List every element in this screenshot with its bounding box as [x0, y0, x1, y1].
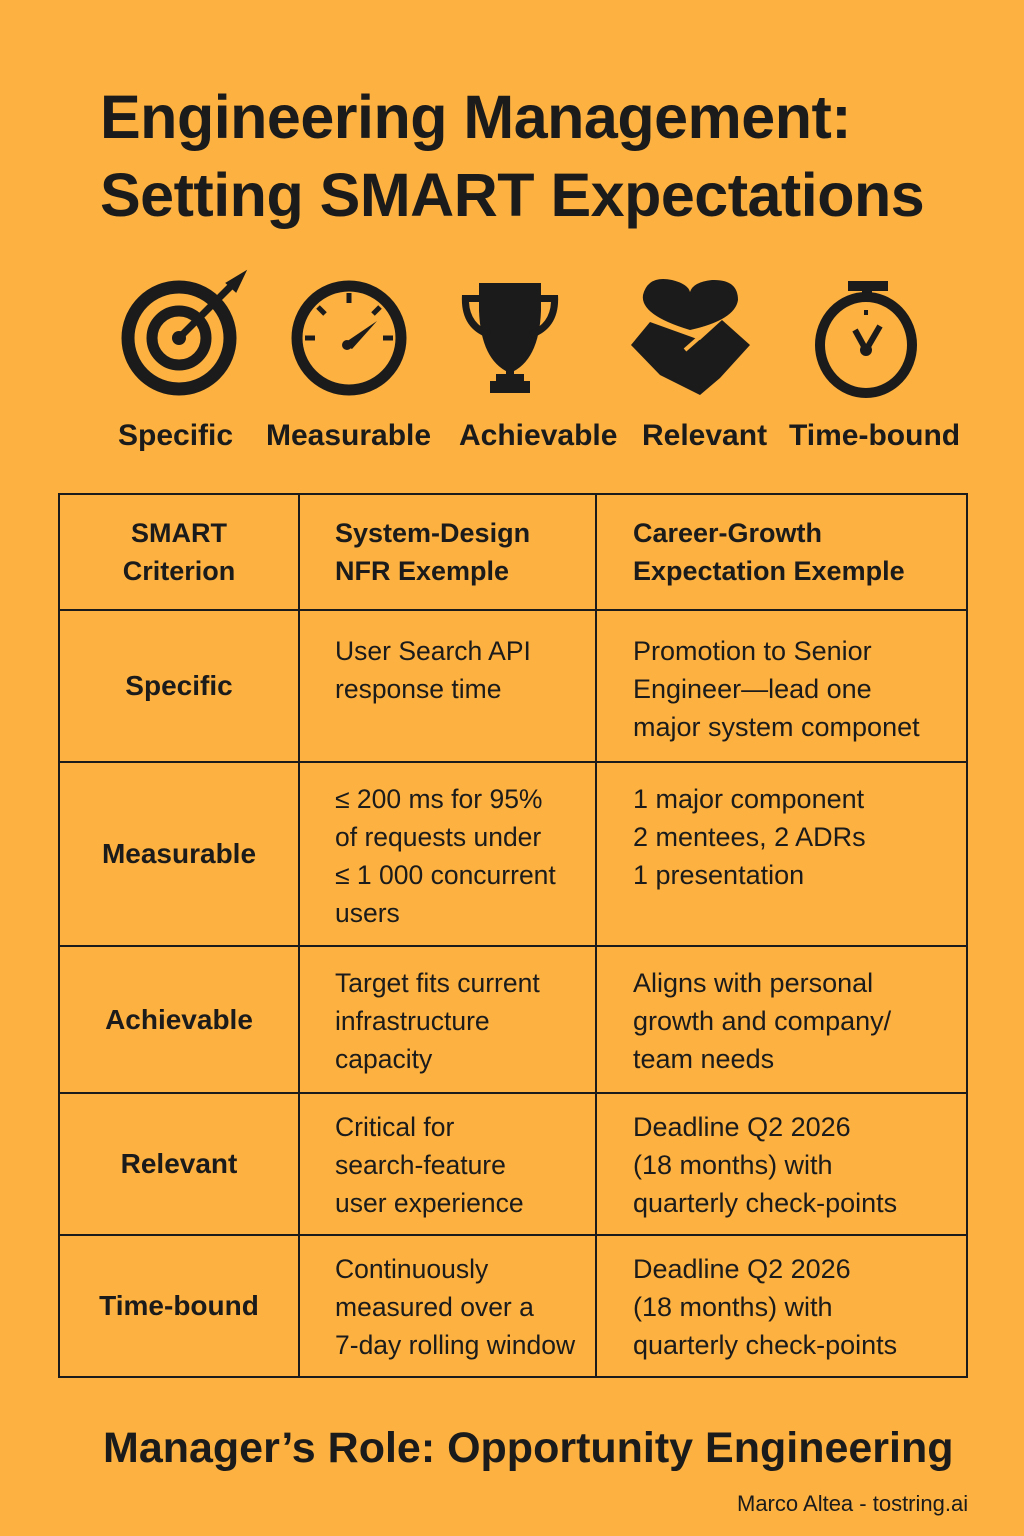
table: quarterly check-points	[633, 1188, 897, 1218]
text: Relevant	[642, 419, 767, 452]
table: response time	[335, 674, 501, 704]
table: Continuously	[335, 1254, 488, 1284]
text: Achievable	[459, 419, 617, 452]
table: Relevant	[121, 1148, 237, 1179]
table: (18 months) with	[633, 1292, 833, 1322]
table: growth and company/	[633, 1006, 891, 1036]
table: Target fits current	[335, 968, 540, 998]
text: Time-bound	[789, 419, 960, 452]
icons row	[122, 270, 917, 398]
table: Deadline Q2 2026	[633, 1112, 851, 1142]
table: Engineer—lead one	[633, 674, 872, 704]
table: team needs	[633, 1044, 774, 1074]
table: Critical for	[335, 1112, 454, 1142]
table: 1 presentation	[633, 860, 804, 890]
table: Criterion	[123, 556, 235, 586]
credit: Marco Altea - tostring.ai	[737, 1491, 968, 1516]
icon: heart handshake	[631, 279, 750, 395]
table: quarterly check-points	[633, 1330, 897, 1360]
table: ≤ 1 000 concurrent	[335, 860, 556, 890]
table: System-Design	[335, 518, 530, 548]
table: ≤ 200 ms for 95%	[335, 784, 542, 814]
icon: trophy	[462, 283, 558, 393]
table: Career-Growth	[633, 518, 822, 548]
table: Achievable	[105, 1004, 253, 1034]
icon: target	[128, 271, 246, 389]
table: user experience	[335, 1188, 524, 1218]
table: Specific	[125, 670, 233, 701]
labels: Specific	[118, 419, 233, 452]
table: 1 major component	[633, 784, 864, 814]
table: Expectation Exemple	[633, 556, 905, 586]
table: search-feature	[335, 1150, 506, 1180]
table: Time-bound	[99, 1290, 259, 1321]
table: (18 months) with	[633, 1150, 833, 1180]
table: infrastructure	[335, 1006, 490, 1036]
table: 7-day rolling window	[335, 1330, 575, 1360]
table: Measurable	[102, 838, 256, 869]
text: Measurable	[266, 419, 431, 452]
title	[100, 83, 924, 229]
table: users	[335, 898, 400, 928]
table: Promotion to Senior	[633, 636, 872, 666]
table: User Search API	[335, 636, 531, 666]
table: capacity	[335, 1044, 432, 1074]
title: Engineering Management:	[100, 83, 851, 151]
table: 2 mentees, 2 ADRs	[633, 822, 866, 852]
table: Deadline Q2 2026	[633, 1254, 851, 1284]
table: NFR Exemple	[335, 556, 509, 586]
footer heading: Manager’s Role: Opportunity Engineering	[103, 1424, 954, 1472]
table: Aligns with personal	[633, 968, 873, 998]
table: measured over a	[335, 1292, 534, 1322]
table: SMART	[131, 518, 227, 548]
table: major system componet	[633, 712, 920, 742]
icon: gauge	[297, 286, 401, 390]
icon: stopwatch	[820, 281, 912, 393]
table	[58, 493, 968, 1378]
title: Setting SMART Expectations	[100, 161, 924, 229]
table: of requests under	[335, 822, 541, 852]
